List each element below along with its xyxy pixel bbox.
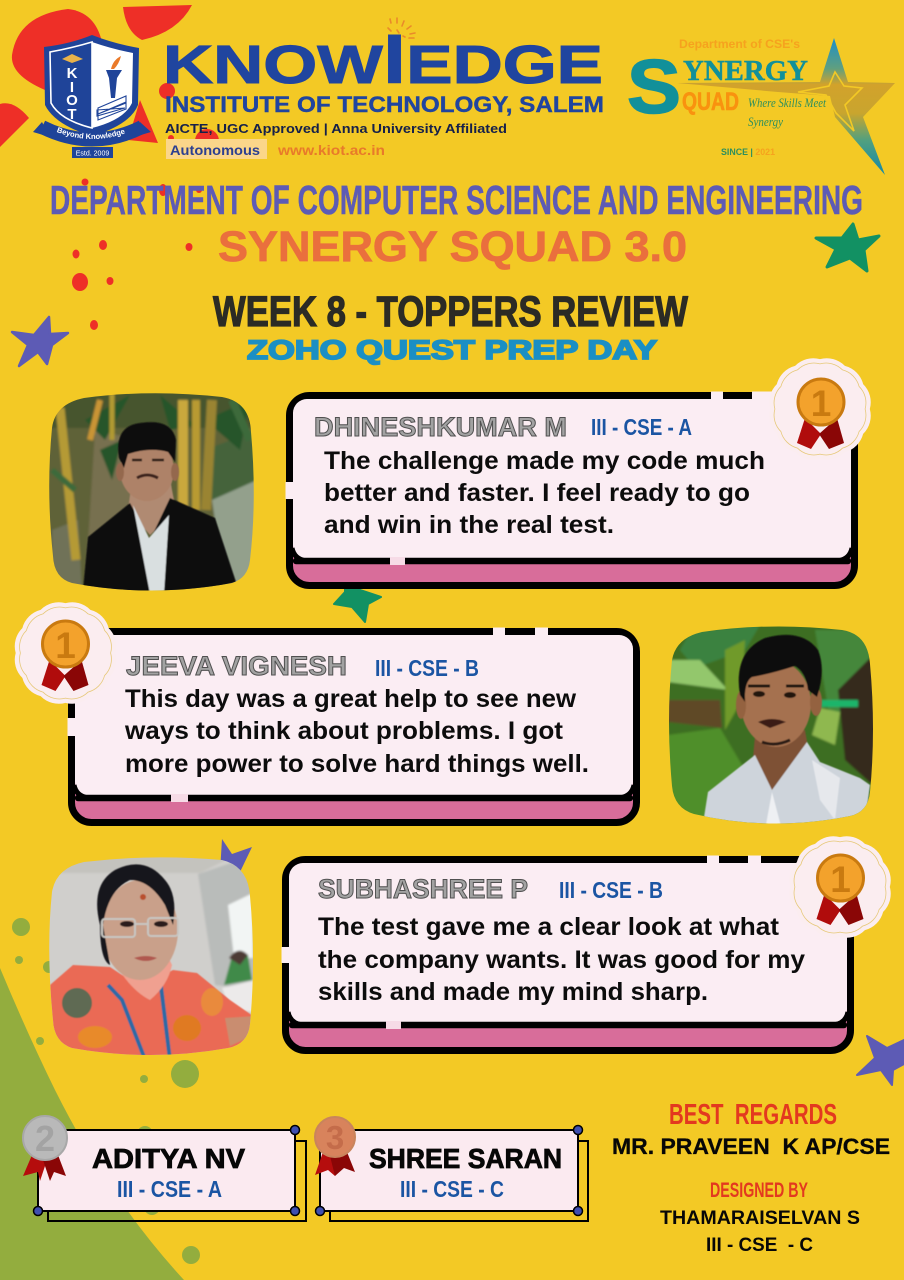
autonomous tag: Autonomous [170, 142, 260, 158]
reviewer class: III - CSE - B [559, 877, 663, 903]
photo: Jeeva [669, 626, 873, 824]
review text: The test gave me a clear look at what [318, 913, 780, 941]
review text: This day was a great help to see new [125, 685, 577, 713]
shield letters: T [67, 106, 77, 123]
name: SHREE SARAN [369, 1143, 562, 1174]
logo: synergy squad: SINCE | 2021 [721, 147, 776, 158]
star: green right [816, 224, 879, 271]
photo: Dhineshkumar [45, 388, 257, 598]
icon: sparkle lines [388, 18, 415, 38]
class: III - CSE - A [117, 1176, 222, 1202]
event heading: SYNERGY SQUAD 3.0 [218, 223, 687, 271]
class: III - CSE - C [400, 1176, 504, 1202]
panel: Dhineshkumar review [290, 396, 854, 586]
shield letters: I [70, 79, 74, 96]
review text: better and faster. I feel ready to go [324, 479, 750, 507]
icon: gold medal two: 1 [55, 625, 76, 666]
icon: bronze medal [315, 1117, 355, 1176]
review text: and win in the real test. [324, 511, 614, 539]
review text: the company wants. It was good for my [318, 946, 805, 974]
star inner cutout [798, 72, 862, 131]
logo: synergy squad: Synergy [748, 114, 783, 129]
established box [72, 147, 113, 158]
reviewer name: JEEVA VIGNESH [126, 651, 347, 681]
star [677, 38, 895, 175]
star: purple bottom right [857, 1036, 904, 1085]
review text: ways to think about problems. I got [124, 717, 564, 745]
affiliation line: AICTE, UGC Approved | Anna University Affiliated [165, 121, 507, 136]
review text [324, 447, 765, 539]
name: ADITYA NV [92, 1143, 245, 1174]
college subtitle: INSTITUTE OF TECHNOLOGY, SALEM [165, 92, 604, 117]
reviewer class: III - CSE - B [375, 655, 479, 681]
panel: Aditya NV [23, 1116, 306, 1221]
credit: designed by: DESIGNED BY [710, 1179, 808, 1202]
decorative green corner [0, 968, 184, 1280]
logo: KIOT shield [33, 35, 151, 158]
icon: gold medal three [789, 836, 891, 938]
credit: best regards: BEST REGARDS [669, 1099, 837, 1131]
website: www.kiot.ac.in [277, 142, 385, 158]
shield letters: O [66, 92, 78, 109]
credit: designer class: III - CSE - C [706, 1235, 813, 1256]
autonomous tag [166, 139, 267, 159]
college name: KNOW lEDGE [163, 23, 603, 97]
panel: Subhashree review [286, 860, 850, 1050]
logo: synergy squad [627, 37, 895, 175]
decorative green dots [12, 918, 200, 1264]
review text: more power to solve hard things well. [125, 750, 589, 778]
week heading: WEEK 8 - TOPPERS REVIEW [213, 288, 688, 336]
logo: KIOT shield: Estd. 2009 [76, 150, 109, 158]
logo: synergy squad: S [627, 45, 681, 130]
review text: skills and made my mind sharp. [318, 978, 708, 1006]
panel: Shree Saran [315, 1117, 588, 1221]
logo: synergy squad: QUAD [682, 88, 739, 116]
review text: The challenge made my code much [324, 447, 765, 475]
icon: gold medal one: 1 [811, 383, 831, 424]
icon: gold medal three: 1 [830, 859, 851, 900]
review text [124, 685, 589, 778]
shield letters [66, 65, 78, 123]
reviewer name: DHINESHKUMAR M [314, 412, 567, 442]
ribbon [42, 127, 142, 140]
panel: Jeeva review [72, 632, 636, 822]
credit: faculty name: MR. PRAVEEN K AP/CSE [612, 1134, 890, 1159]
icon: graduation cap [62, 54, 83, 63]
icon: silver medal: 2 [35, 1118, 55, 1159]
ribbon text: Beyond Knowledge [56, 127, 125, 139]
icon: silver medal [23, 1116, 67, 1181]
decorative red shapes [0, 5, 219, 330]
reviewer name: SUBHASHREE P [318, 874, 528, 904]
logo: synergy squad: Where Skills Meet [748, 95, 826, 110]
photo: Subhashree [45, 853, 257, 1063]
icon: gold medal one [769, 358, 871, 460]
sub heading: ZOHO QUEST PREP DAY [247, 335, 657, 365]
review text [318, 913, 805, 1006]
icon: torch and books [97, 56, 126, 120]
icon: gold medal two [15, 602, 116, 704]
star: purple left [12, 317, 68, 366]
icon: bronze medal: 3 [326, 1119, 344, 1156]
star: purple behind photo three [220, 839, 252, 872]
credit: designer name: THAMARAISELVAN S [660, 1208, 860, 1229]
logo: synergy squad: Department of CSE's [679, 37, 800, 51]
logo: synergy squad: YNERGY [683, 55, 808, 87]
shield letters: K [67, 65, 78, 82]
reviewer class: III - CSE - A [591, 414, 692, 440]
star: green behind card one [334, 585, 381, 622]
